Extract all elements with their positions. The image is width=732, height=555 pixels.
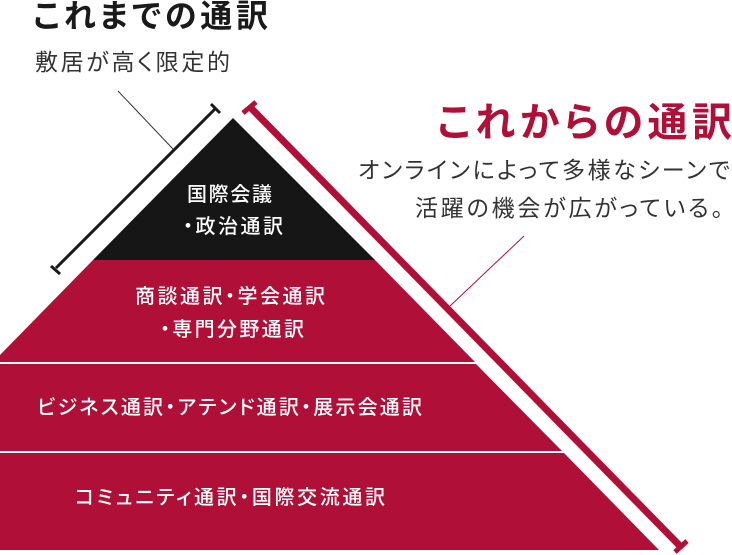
- label: top tier: [183, 183, 283, 238]
- bracket: black: [51, 104, 220, 274]
- leader line: black: [118, 91, 173, 149]
- label: second tier: ・専門分野通訳: [160, 318, 304, 341]
- pyramid tier: bottom: [0, 453, 659, 550]
- label: second tier: 商談通訳・学会通訳: [135, 285, 325, 308]
- label: top tier: 国際会議: [187, 183, 272, 206]
- label: second tier: [135, 285, 325, 341]
- label: bottom tier: コミュニティ通訳・国際交流通訳: [75, 486, 385, 509]
- pyramid tier: second: [0, 260, 475, 362]
- leader line: red: [450, 236, 524, 306]
- label: top tier: ・政治通訳: [183, 215, 283, 238]
- label: third tier: ビジネス通訳・アテンド通訳・展示会通訳: [37, 396, 422, 419]
- text: future description: 活躍の機会が広がっている。: [415, 195, 723, 221]
- bracket: red: [243, 102, 687, 552]
- text: future description: オンラインによって多様なシーンで: [358, 157, 730, 183]
- pyramid tier: top black: [93, 118, 375, 260]
- pyramid tier: third: [0, 364, 562, 451]
- heading: future interpreting: これからの通訳: [437, 101, 732, 145]
- text: traditional description: 敷居が高く限定的: [35, 49, 230, 75]
- text: future description: [358, 157, 730, 221]
